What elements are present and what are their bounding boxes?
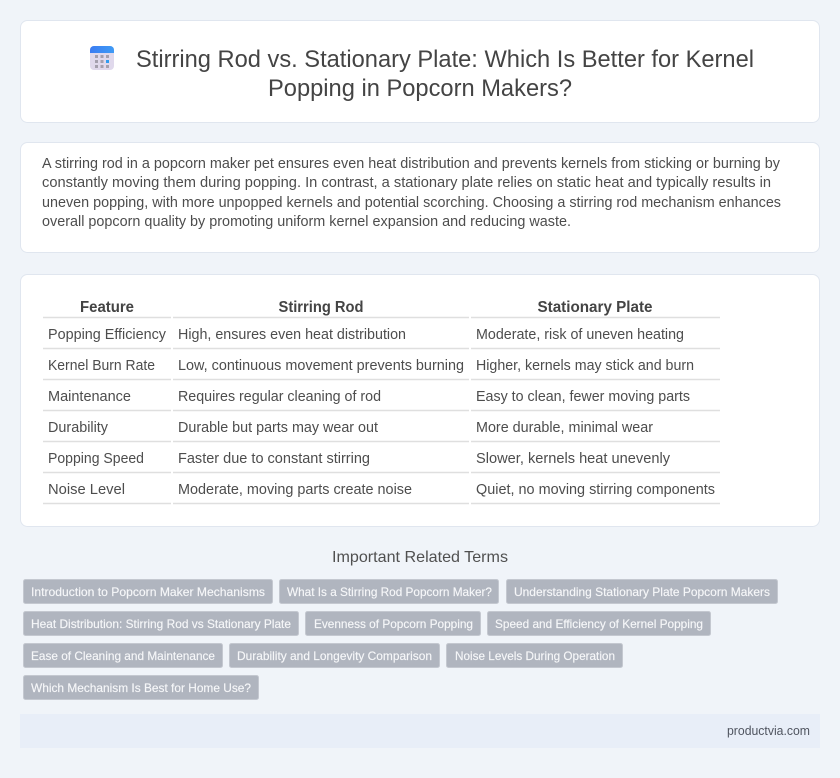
text block: summary paragraph: overall popcorn quality by promoting uniform kernel expansion and reducing waste. xyxy=(42,214,571,230)
text block: summary paragraph: A stirring rod in a popcorn maker pet ensures even heat distribution and prevents kernels from sticking or burning by xyxy=(42,156,781,172)
heading: related terms: Important Related Terms xyxy=(332,549,508,566)
row: noise level: Moderate, moving parts create noise xyxy=(178,482,412,498)
row: kernel burn rate: Kernel Burn Rate xyxy=(48,358,155,374)
row: kernel burn rate: Low, continuous movement prevents burning xyxy=(178,358,464,374)
text block: summary paragraph: constantly moving them during popping. In contrast, a stationary plate relies on static heat and typically results in xyxy=(42,175,771,191)
related terms chips: Introduction to Popcorn Maker Mechanisms xyxy=(31,585,265,599)
row: popping efficiency: Popping Efficiency xyxy=(48,327,167,343)
table header: Stationary Plate xyxy=(538,299,653,316)
row: noise level: Quiet, no moving stirring components xyxy=(476,482,715,498)
row: popping speed: Popping Speed xyxy=(48,451,144,467)
title xyxy=(136,46,754,102)
related terms chips: Heat Distribution: Stirring Rod vs Stationary Plate xyxy=(31,617,291,631)
row: kernel burn rate xyxy=(48,358,694,374)
related terms chips: Understanding Stationary Plate Popcorn Makers xyxy=(514,585,770,599)
row: popping speed xyxy=(48,451,671,467)
row: maintenance xyxy=(48,389,690,405)
title: Stirring Rod vs. Stationary Plate: Which Is Better for Kernel xyxy=(136,46,754,73)
related terms chips: Evenness of Popcorn Popping xyxy=(314,617,473,631)
text block: summary paragraph xyxy=(42,156,781,230)
icon: calendar xyxy=(90,46,114,70)
footer: productvia.com xyxy=(727,724,810,738)
row: noise level: Noise Level xyxy=(48,482,125,498)
row: popping efficiency: Moderate, risk of uneven heating xyxy=(476,327,684,343)
panel: comparison table xyxy=(20,274,820,526)
row: durability: Durability xyxy=(48,420,109,436)
related terms chips: Ease of Cleaning and Maintenance xyxy=(31,649,215,663)
row: durability: More durable, minimal wear xyxy=(476,420,653,436)
row: durability: Durable but parts may wear out xyxy=(178,420,378,436)
row: kernel burn rate: Higher, kernels may stick and burn xyxy=(476,358,694,374)
table header xyxy=(80,299,653,316)
panel: summary xyxy=(20,142,820,252)
related terms chips: Speed and Efficiency of Kernel Popping xyxy=(495,617,703,631)
related terms chips: What Is a Stirring Rod Popcorn Maker? xyxy=(287,585,492,599)
table header: Stirring Rod xyxy=(278,299,364,316)
panel: header xyxy=(20,20,820,122)
related terms chips xyxy=(24,580,778,700)
title: Popping in Popcorn Makers? xyxy=(268,75,572,102)
row: maintenance: Maintenance xyxy=(48,389,131,405)
row: durability xyxy=(48,420,653,436)
row: maintenance: Easy to clean, fewer moving parts xyxy=(476,389,690,405)
row: popping efficiency: High, ensures even heat distribution xyxy=(178,327,406,343)
row: popping speed: Faster due to constant stirring xyxy=(178,451,370,467)
footer xyxy=(20,714,820,748)
row: noise level xyxy=(48,482,715,498)
related terms chips: Noise Levels During Operation xyxy=(455,649,615,663)
row: popping efficiency xyxy=(48,327,684,343)
row: popping speed: Slower, kernels heat unevenly xyxy=(476,451,671,467)
table header: Feature xyxy=(80,299,134,316)
related terms chips: Durability and Longevity Comparison xyxy=(237,649,432,663)
row: maintenance: Requires regular cleaning of rod xyxy=(178,389,381,405)
related terms chips: Which Mechanism Is Best for Home Use? xyxy=(31,681,251,695)
text block: summary paragraph: uneven popping, with more unpopped kernels and potential scorching. Choosing a stirring rod mechanism enhances xyxy=(42,195,781,211)
